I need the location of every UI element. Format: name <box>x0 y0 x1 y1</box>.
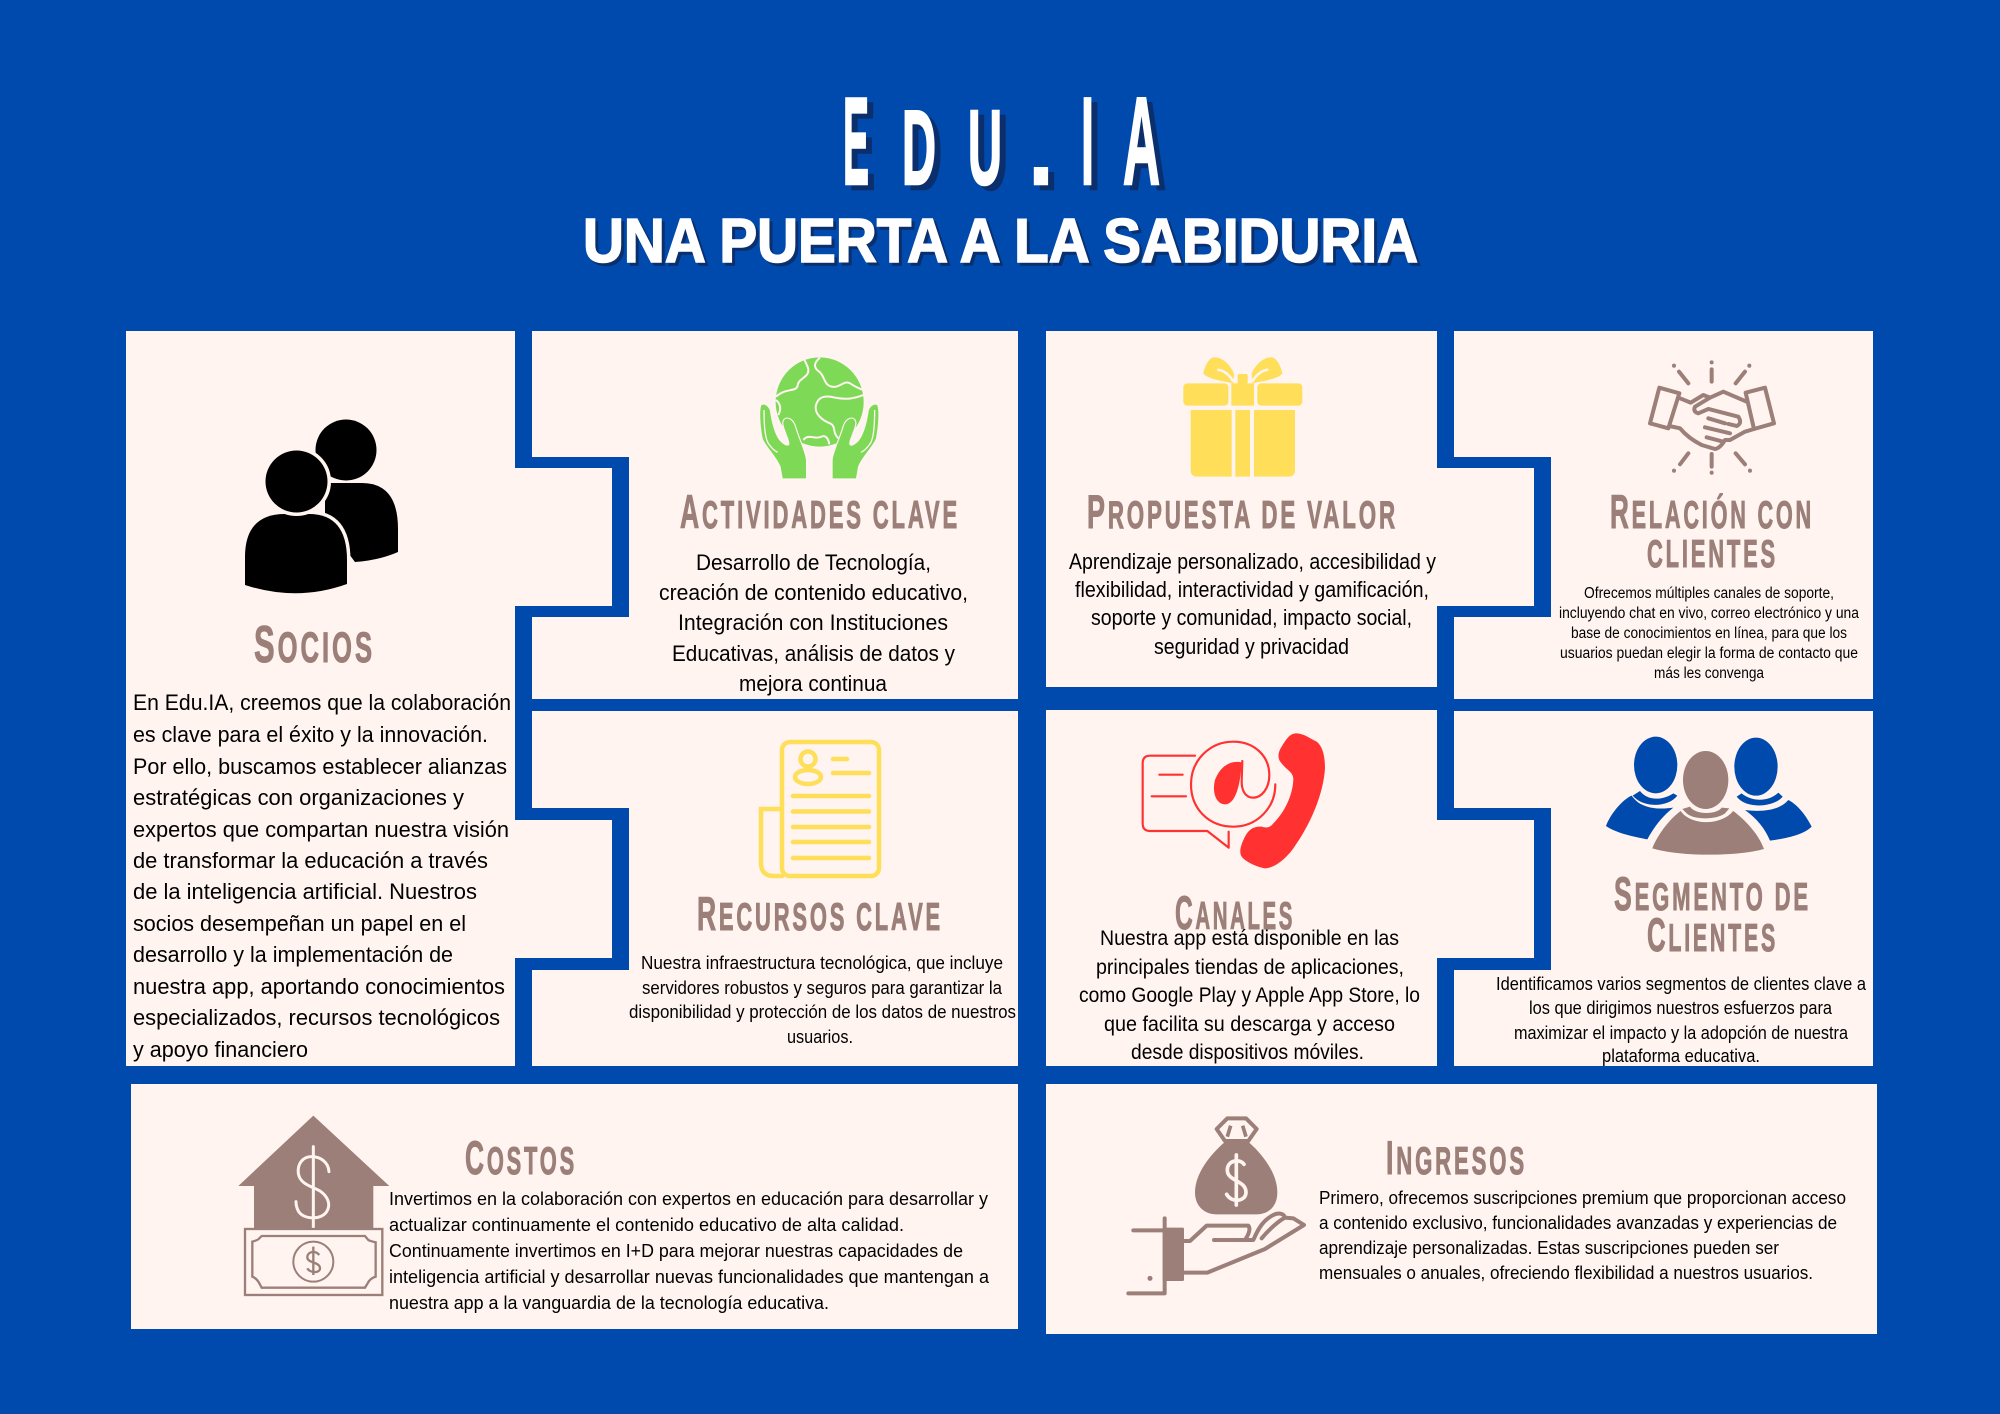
body text: principales tiendas de aplicaciones, <box>1096 955 1404 979</box>
body text: nuestra app, aportando conocimientos <box>133 974 505 999</box>
icon: two people <box>245 420 398 593</box>
body text: Desarrollo de Tecnología, <box>696 550 931 575</box>
body text: a contenido exclusivo, funcionalidades avanzadas y experiencias de <box>1319 1213 1837 1233</box>
body text: que facilita su descarga y acceso <box>1104 1012 1395 1036</box>
icon: house with money <box>238 1116 389 1295</box>
body text <box>629 953 1016 1047</box>
body text <box>133 690 511 1062</box>
panel: costos <box>131 1084 1018 1329</box>
panel: relación con clientes <box>1454 331 1873 699</box>
title: D <box>902 89 936 207</box>
heading: CLIENTES <box>1647 533 1778 576</box>
panel: propuesta de valor <box>1046 331 1551 687</box>
heading: RELACIÓN CON <box>1610 485 1814 538</box>
body text: Integración con Instituciones <box>678 610 948 635</box>
icon: contact channels <box>1143 733 1325 868</box>
body text: actualizar continuamente el contenido educativo de alta calidad. <box>389 1215 904 1235</box>
body text: expertos que compartan nuestra visión <box>133 817 509 842</box>
body text: de la inteligencia artificial. Nuestros <box>133 879 477 904</box>
title: I <box>1081 73 1094 211</box>
body text: mejora continua <box>739 671 887 696</box>
body text: En Edu.IA, creemos que la colaboración <box>133 690 511 715</box>
body text: y apoyo financiero <box>133 1037 308 1062</box>
icon: handshake <box>1650 362 1774 473</box>
body text: usuarios. <box>787 1027 853 1047</box>
title: E <box>843 73 869 211</box>
body text: desarrollo y la implementación de <box>133 942 453 967</box>
body text: Educativas, análisis de datos y <box>672 641 956 666</box>
body text: inteligencia artificial y desarrollar nuevas funcionalidades que mantengan a <box>389 1267 990 1287</box>
panel: canales <box>1046 710 1551 1066</box>
body text: estratégicas con organizaciones y <box>133 785 465 810</box>
panel: segmento de clientes <box>1454 711 1873 1066</box>
body text: mensuales o anuales, ofreciendo flexibilidad a nuestros usuarios. <box>1319 1263 1813 1283</box>
body text: Nuestra infraestructura tecnológica, que incluye <box>641 953 1003 973</box>
body text: maximizar el impacto y la adopción de nuestra <box>1514 1023 1849 1043</box>
body text: creación de contenido educativo, <box>659 580 968 605</box>
body text: Por ello, buscamos establecer alianzas <box>133 754 507 779</box>
body text <box>389 1189 990 1313</box>
body text: es clave para el éxito y la innovación. <box>133 722 488 747</box>
panel: ingresos <box>1046 1084 1877 1334</box>
body text <box>1069 549 1437 659</box>
body text: incluyendo chat en vivo, correo electrónico y una <box>1559 605 1859 622</box>
body text: servidores robustos y seguros para garantizar la <box>642 978 1003 998</box>
body text: nuestra app a la vanguardia de la tecnología educativa. <box>389 1293 829 1313</box>
icon: group of three people <box>1606 737 1812 855</box>
body text <box>659 550 968 696</box>
text: A <box>1123 73 1160 211</box>
heading: SEGMENTO DE <box>1614 867 1811 920</box>
body text: los que dirigimos nuestros esfuerzos para <box>1529 998 1833 1018</box>
body text <box>1496 974 1867 1066</box>
title <box>843 73 1160 211</box>
body text: Continuamente invertimos en I+D para mejorar nuestras capacidades de <box>389 1241 963 1261</box>
body text: Identificamos varios segmentos de clientes clave a <box>1496 974 1867 994</box>
body text: más les convenga <box>1654 665 1764 682</box>
heading: CLIENTES <box>1647 908 1778 961</box>
body text: como Google Play y Apple App Store, lo <box>1079 983 1420 1007</box>
body text: Ofrecemos múltiples canales de soporte, <box>1584 585 1834 602</box>
body text <box>1079 926 1420 1064</box>
panel: actividades clave <box>532 331 1018 699</box>
icon: document <box>761 742 879 876</box>
subtitle: UNA PUERTA A LA SABIDURIA <box>583 207 1418 276</box>
body text: soporte y comunidad, impacto social, <box>1091 605 1412 630</box>
heading: RECURSOS CLAVE <box>697 887 943 940</box>
panel: recursos clave <box>532 711 1018 1066</box>
body text: usuarios puedan elegir la forma de contacto que <box>1560 645 1858 662</box>
body text <box>1559 585 1859 682</box>
body text: de transformar la educación a través <box>133 848 488 873</box>
heading <box>1610 485 1814 576</box>
body text: Primero, ofrecemos suscripciones premium que proporcionan acceso <box>1319 1188 1846 1208</box>
body text: especializados, recursos tecnológicos <box>133 1005 500 1030</box>
body text: flexibilidad, interactividad y gamificación, <box>1075 577 1429 602</box>
body text: Aprendizaje personalizado, accesibilidad y <box>1069 549 1437 574</box>
title: U <box>968 89 1002 207</box>
heading: INGRESOS <box>1386 1131 1527 1184</box>
body text: base de conocimientos en línea, para que los <box>1571 625 1847 642</box>
body text: plataforma educativa. <box>1602 1046 1760 1066</box>
body text: aprendizaje personalizadas. Estas suscripciones pueden ser <box>1319 1238 1779 1258</box>
icon: gift box <box>1183 357 1302 477</box>
body text <box>1319 1188 1846 1283</box>
body text: socios desempeñan un papel en el <box>133 911 466 936</box>
body text: disponibilidad y protección de los datos de nuestros <box>629 1002 1016 1022</box>
body text: desde dispositivos móviles. <box>1131 1040 1364 1064</box>
title: . <box>1029 89 1053 207</box>
heading: ACTIVIDADES CLAVE <box>680 485 960 538</box>
heading: COSTOS <box>465 1131 577 1184</box>
body text: seguridad y privacidad <box>1154 634 1349 659</box>
panel: socios <box>126 331 629 1066</box>
heading: CANALES <box>1175 886 1295 939</box>
icon: hand holding money bag <box>1128 1118 1304 1293</box>
body text: Invertimos en la colaboración con expertos en educación para desarrollar y <box>389 1189 988 1209</box>
heading: PROPUESTA DE VALOR <box>1087 485 1398 538</box>
icon: globe held by hands <box>760 357 878 478</box>
heading: SOCIOS <box>254 616 375 674</box>
body text: Nuestra app está disponible en las <box>1100 926 1399 950</box>
heading <box>1614 867 1811 961</box>
